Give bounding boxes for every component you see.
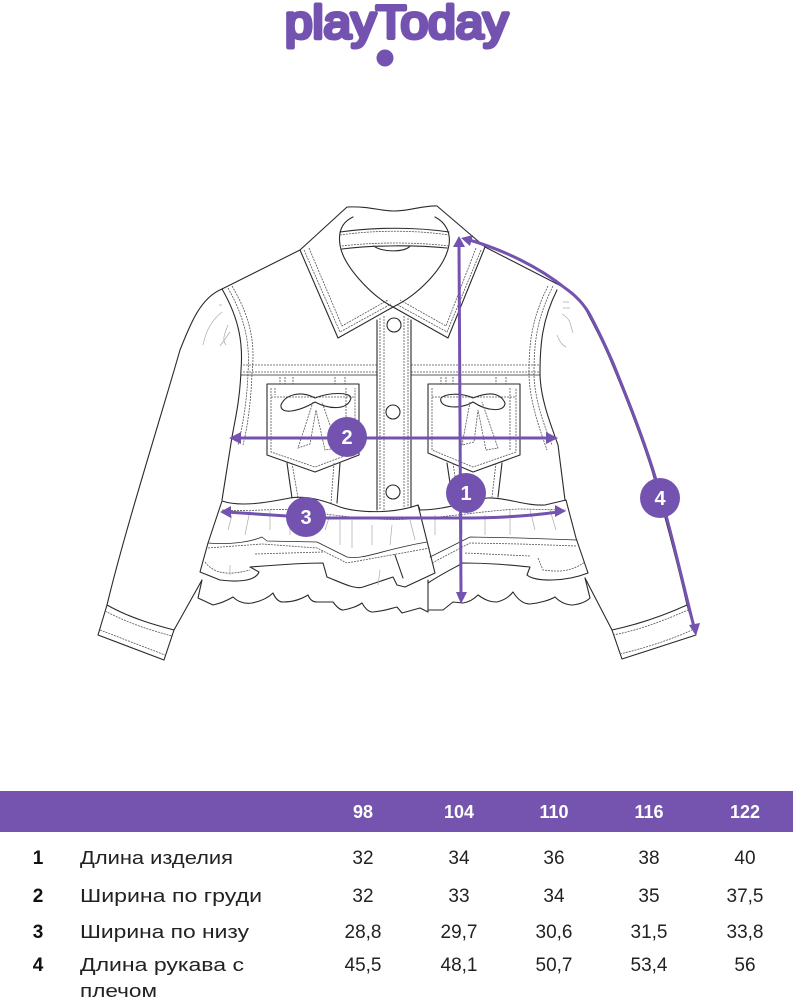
measurement arrows (220, 235, 700, 636)
row 3: 30,6 (536, 922, 572, 943)
arrow 2: chest width (229, 417, 558, 457)
row 2 (33, 885, 763, 907)
row 4: 50,7 (536, 955, 572, 976)
row 2: 37,5 (727, 886, 763, 907)
row 2: 35 (638, 886, 660, 907)
left sleeve (98, 289, 230, 660)
row 1: Длина изделия (80, 847, 233, 868)
row 1: 40 (734, 848, 756, 869)
size table (0, 791, 793, 1000)
row 2: 32 (352, 886, 374, 907)
table header: 110 (539, 802, 569, 822)
row 3: 33,8 (727, 922, 763, 943)
logo: playToday (285, 0, 508, 66)
arrow 1: garment length (446, 236, 486, 604)
placket and buttons (377, 316, 411, 510)
row 3: 3 (33, 922, 43, 943)
table header (0, 791, 793, 832)
right sleeve (557, 288, 696, 659)
marker 2: 2 (341, 427, 353, 449)
row 4: Длина рукава с (80, 954, 244, 975)
row 1: 34 (448, 848, 470, 869)
collar and shoulders (222, 206, 565, 338)
body side and armhole seams (222, 286, 565, 500)
row 2: 33 (448, 886, 470, 907)
row 4: 4 (33, 955, 44, 976)
left pocket with bow (267, 377, 359, 472)
arrow 4: sleeve length (461, 235, 700, 636)
row 2: 34 (543, 886, 565, 907)
marker 4: 4 (654, 488, 666, 510)
row 4: 53,4 (631, 955, 668, 976)
table header: 104 (444, 802, 474, 822)
row 1: 36 (543, 848, 565, 869)
marker 1: 1 (460, 483, 472, 505)
yoke seam (241, 365, 540, 375)
marker 3: 3 (300, 507, 312, 529)
row 1: 1 (33, 848, 44, 869)
row 2: 2 (33, 886, 43, 907)
row 3 (33, 921, 763, 943)
marker 2 (327, 417, 367, 457)
row 2: Ширина по груди (80, 885, 262, 906)
row 4: 56 (734, 955, 756, 976)
table header: 122 (730, 802, 760, 822)
row 1 (33, 847, 756, 869)
row 1: 32 (352, 848, 374, 869)
row 4 (33, 954, 756, 1000)
arrow 3: hem width (220, 497, 566, 537)
table header: 98 (353, 802, 373, 822)
row 1: 38 (638, 848, 660, 869)
row 3: 29,7 (441, 922, 477, 943)
row 4: 48,1 (441, 955, 477, 976)
peplum ruffles (198, 497, 590, 613)
waist straps (287, 463, 502, 503)
row 3: 31,5 (631, 922, 667, 943)
right pocket with bow (428, 377, 520, 472)
row 3: Ширина по низу (80, 921, 250, 942)
row 4: 45,5 (345, 955, 381, 976)
row 3: 28,8 (345, 922, 381, 943)
jacket technical drawing (98, 206, 696, 660)
table header: 116 (634, 802, 664, 822)
marker 3 (286, 497, 326, 537)
marker 1 (446, 473, 486, 513)
marker 4 (640, 478, 680, 518)
